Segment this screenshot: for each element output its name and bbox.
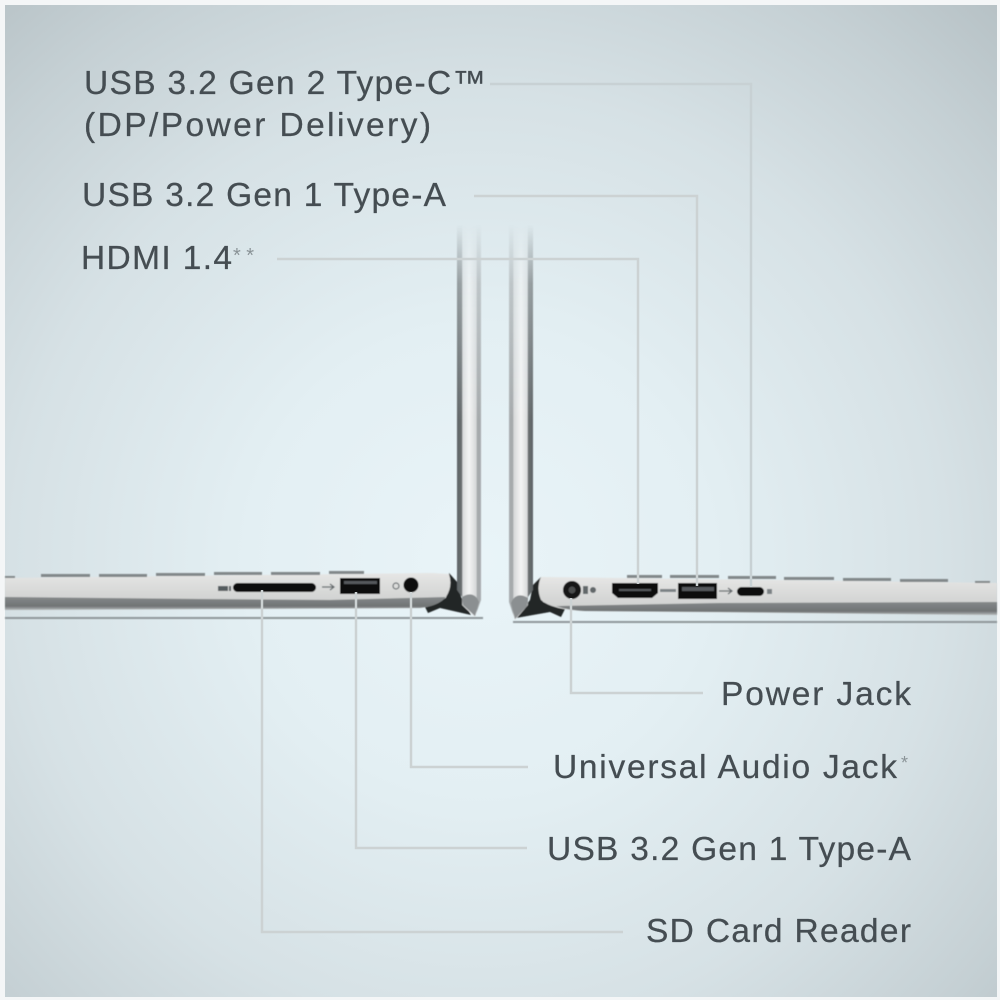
label: USB 3.2 Gen 1 Type-A bottom: USB 3.2 Gen 1 Type-A [547, 831, 912, 868]
label: USB 3.2 Gen 1 Type-A top: USB 3.2 Gen 1 Type-A [82, 177, 447, 214]
leader: power jack [571, 598, 703, 693]
left base dark edge [5, 597, 446, 610]
audio icon [393, 583, 399, 589]
leader: SD card [262, 590, 623, 932]
left lid tip highlight [462, 594, 479, 616]
right laptop lid [509, 225, 533, 620]
label: SD Card Reader: SD Card Reader [646, 913, 911, 950]
USB icon left [322, 584, 334, 590]
label: HDMI 1.4: ** [233, 245, 254, 267]
leader: USB Type-A top [474, 196, 697, 586]
USB Type-C port [737, 587, 764, 596]
label: Universal Audio Jack: * [901, 753, 908, 773]
label: Power Jack: Power Jack [721, 676, 911, 713]
label: HDMI 1.4: HDMI 1.4 [81, 240, 232, 277]
USB icon right [719, 588, 732, 594]
leader: USB-C [490, 84, 751, 587]
label: Universal Audio Jack: Universal Audio Jack [553, 749, 897, 786]
DP label [767, 589, 772, 594]
leader: audio jack [411, 592, 528, 767]
right base dark edge [556, 602, 997, 615]
power jack [563, 581, 581, 599]
left laptop side view [5, 225, 483, 619]
left base body [5, 573, 450, 610]
USB Type-A port right [678, 583, 717, 599]
right base body [538, 577, 997, 615]
right keyboard keys [627, 575, 990, 583]
USB Type-A port left [340, 578, 380, 594]
audio jack [404, 578, 418, 592]
left hinge [424, 573, 471, 615]
leader: HDMI [277, 259, 638, 584]
label: USB 3.2 Gen 2 Type-C: USB 3.2 Gen 2 Type-C™ [84, 65, 486, 102]
SD card label [218, 586, 231, 591]
right lid tip highlight [511, 595, 528, 619]
leader lines [262, 84, 751, 932]
label: USB 3.2 Gen 2 Type-C [84, 65, 486, 144]
right hinge [516, 577, 565, 618]
right laptop side view [509, 225, 997, 623]
HDMI label [660, 589, 676, 592]
left ground shadow [5, 617, 483, 619]
power indicators [583, 586, 596, 594]
leader: USB Type-A bottom [356, 592, 527, 848]
SD card slot [233, 583, 316, 592]
HDMI port [612, 583, 658, 598]
left keyboard keys [5, 571, 364, 578]
right ground shadow [513, 621, 997, 623]
left laptop lid [457, 225, 481, 617]
label: USB 3.2 Gen 2 Type-C: (DP/Power Delivery) [84, 107, 431, 144]
